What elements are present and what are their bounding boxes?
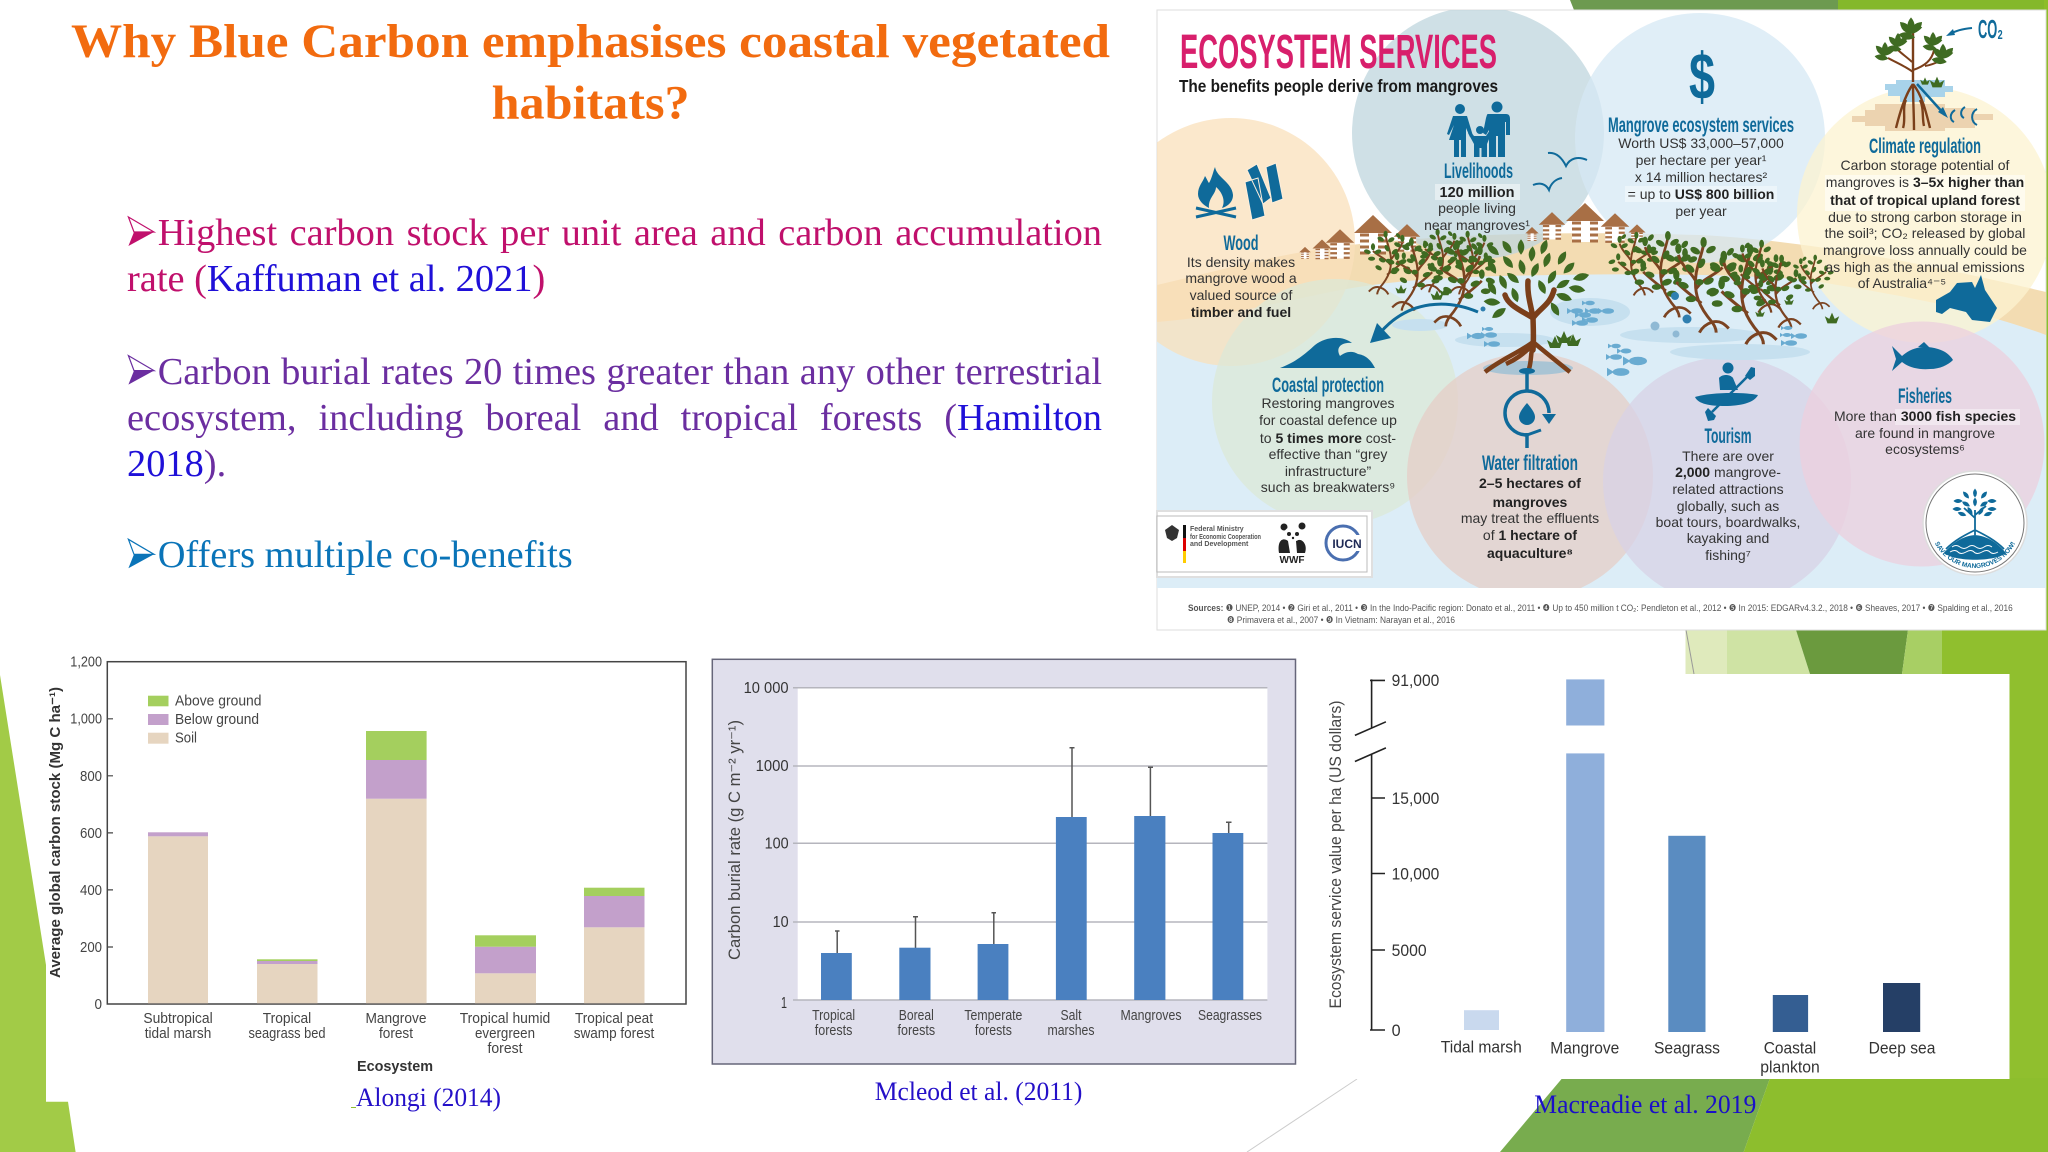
x labels: Seagrasses <box>1198 1007 1262 1024</box>
x labels: forests <box>898 1022 935 1039</box>
y ticks: 0 <box>1392 1022 1401 1040</box>
heading: ecosystem services: ECOSYSTEM SERVICES <box>1180 26 1497 79</box>
block: water filtration: may treat the effluents <box>1461 510 1599 526</box>
block: tourism: There are over <box>1682 448 1774 464</box>
bar: mangrove forest <box>366 731 427 1003</box>
chart 3 white backing <box>1300 674 2010 1079</box>
block: livelihoods: 120 million <box>1440 185 1514 201</box>
y ticks: 400 <box>80 883 102 899</box>
background: lower right green facets <box>1247 630 2048 1152</box>
heading: water filtration: Water filtration <box>1482 452 1578 475</box>
x labels: Mangrove <box>1550 1040 1619 1058</box>
block: livelihoods <box>1424 102 1530 233</box>
y ticks: 91,000 <box>1392 672 1439 690</box>
logos box <box>1157 511 1372 577</box>
x labels: forests <box>975 1022 1012 1039</box>
block: climate regulation: as high as the annual emissions <box>1825 259 2025 275</box>
icon: German eagle <box>1165 525 1179 541</box>
legend: Above ground <box>175 694 262 710</box>
mangrove trees right group <box>1608 231 1834 344</box>
bars <box>821 816 1243 1000</box>
block: coastal protection <box>1259 304 1478 495</box>
x labels: Tropical humid <box>460 1011 550 1027</box>
legend: Soil <box>175 730 197 746</box>
bullet 2 text: 2018). <box>127 442 226 484</box>
bullet 1 text: rate (Kaffuman et al. 2021) <box>127 258 545 300</box>
y ticks: 15,000 <box>1392 790 1439 808</box>
block: fisheries <box>1834 342 2020 457</box>
chart: average global carbon stock <box>47 655 686 1075</box>
x labels: Mangroves <box>1120 1007 1182 1024</box>
heading: tourism: Tourism <box>1704 425 1752 448</box>
icon: family <box>1447 102 1510 157</box>
block: wood: timber and fuel <box>1191 304 1291 320</box>
y ticks: 5000 <box>1392 942 1427 960</box>
icon: Australia <box>1936 275 1997 322</box>
icon: dollar: $ <box>1689 39 1715 113</box>
bullet 2 text: ecosystem, including boreal and tropical forests (Hamilton <box>127 396 1102 438</box>
heading: livelihoods: Livelihoods <box>1444 160 1513 183</box>
block: tourism: boat tours, boardwalks, <box>1656 514 1800 530</box>
panel background <box>712 659 1296 1064</box>
block: climate regulation: mangrove loss annually could be <box>1823 242 2027 258</box>
block: coastal protection: infrastructure” <box>1285 463 1372 479</box>
x labels: Tidal marsh <box>1441 1039 1522 1057</box>
block: water filtration: of 1 hectare of <box>1483 527 1577 543</box>
x labels: Tropical peat <box>575 1011 653 1027</box>
block: mangrove ecosystem services: Worth US$ 33,000–57,000 <box>1618 135 1784 151</box>
bar: subtropical tidal marsh <box>148 832 208 1003</box>
block: tourism: kayaking and <box>1687 530 1769 546</box>
y ticks: 100 <box>765 836 789 852</box>
x labels: forest <box>379 1026 413 1042</box>
x labels: tidal marsh <box>145 1026 211 1042</box>
block: fisheries: ecosystems⁶ <box>1885 441 1965 457</box>
x labels: Deep sea <box>1869 1040 1936 1058</box>
y ticks: 200 <box>80 940 102 956</box>
block: climate regulation: due to strong carbon storage in <box>1828 209 2022 225</box>
y ticks: 1,000 <box>70 712 102 728</box>
icon: bullet arrow 1 <box>128 217 154 246</box>
x labels <box>812 1007 1262 1039</box>
icon: WWF panda: WWF <box>1280 555 1304 566</box>
x labels <box>1441 1039 1936 1076</box>
heading: wood: Wood <box>1224 232 1258 255</box>
y ticks: 600 <box>80 826 102 842</box>
block: fisheries: More than 3000 fish species <box>1834 408 2016 424</box>
title <box>71 15 1110 130</box>
block: mangrove ecosystem services: x 14 million hectares² <box>1635 169 1767 185</box>
y ticks: 10,000 <box>1392 866 1439 884</box>
block: tourism <box>1656 362 1800 563</box>
chart: ecosystem service value <box>1327 672 1936 1076</box>
block: mangrove ecosystem services: per year <box>1675 203 1727 219</box>
ministry text: Federal Ministry <box>1190 526 1244 533</box>
x labels <box>143 1011 654 1057</box>
badge: save our mangroves now: SAVE OUR MANGROVES NOW! <box>1935 542 2015 568</box>
x labels: marshes <box>1048 1022 1094 1039</box>
heading: coastal protection: Coastal protection <box>1272 374 1384 397</box>
block: climate regulation: of Australia⁴⁻⁵ <box>1858 275 1946 291</box>
x labels: Tropical <box>812 1007 855 1024</box>
icon: IUCN <box>1326 526 1363 560</box>
bar: seagrass <box>1668 836 1706 1032</box>
block: wood: valued source of <box>1190 287 1292 303</box>
heading: climate regulation: Climate regulation <box>1869 135 1981 158</box>
y axis title: Carbon burial rate (g C m⁻² yr⁻¹) <box>726 720 744 960</box>
block: tourism: related attractions <box>1672 481 1784 497</box>
bar: tropical seagrass bed <box>257 959 318 1003</box>
mangrove trees left group <box>1363 229 1496 326</box>
block: tourism: 2,000 mangrove- <box>1675 464 1781 480</box>
icon: IUCN: IUCN <box>1332 537 1362 551</box>
title: habitats? <box>492 76 690 130</box>
block: climate regulation <box>1823 14 2027 322</box>
x labels: Boreal <box>899 1007 934 1024</box>
y axis title: Ecosystem service value per ha (US dollars) <box>1327 700 1345 1008</box>
block: climate regulation: mangroves is 3–5x higher than <box>1826 174 2024 190</box>
x labels: Mangrove <box>366 1011 426 1027</box>
legend <box>148 694 262 746</box>
bullet 2 text: Carbon burial rates 20 times greater than any other terrestrial <box>158 350 1102 392</box>
block: climate regulation: the soil³; CO₂ released by global <box>1825 225 2025 241</box>
block: water filtration: 2–5 hectares of <box>1479 475 1581 491</box>
panel: ecosystem services infographic <box>1156 10 2046 630</box>
y axis title: Average global carbon stock (Mg C ha⁻¹) <box>47 687 64 978</box>
icon: water cycle <box>1505 368 1556 448</box>
citation: Mcleod: Mcleod et al. (2011) <box>875 1077 1082 1106</box>
y ticks: 1,200 <box>70 655 102 671</box>
plot area <box>798 688 1267 1000</box>
bar: coastal plankton <box>1773 995 1808 1032</box>
badge: save our mangroves now <box>1922 470 2028 576</box>
x labels: Temperate <box>964 1007 1022 1024</box>
ministry text <box>1190 526 1261 548</box>
y ticks <box>744 680 789 1012</box>
block: coastal protection: Restoring mangroves <box>1261 395 1395 411</box>
chart: carbon burial rate <box>712 659 1296 1064</box>
x labels: Salt <box>1060 1007 1082 1024</box>
block: mangrove ecosystem services: per hectare per year¹ <box>1636 152 1767 168</box>
icon: kayak <box>1695 362 1758 421</box>
icon: flame and logs <box>1196 163 1283 220</box>
icon: tree with CO2 <box>1852 14 2003 131</box>
icon: wave <box>1280 338 1375 368</box>
background: top right green strip <box>1570 0 2048 640</box>
sources: ❽ Primavera et al., 2007 • ❾ In Vietnam: Narayan et al., 2016 <box>1227 615 1455 626</box>
icon: bullet arrow 3 <box>128 539 154 568</box>
icon: fish <box>1892 342 1953 371</box>
crabs <box>1480 292 1692 338</box>
x labels: plankton <box>1760 1058 1820 1076</box>
block: coastal protection: effective than “grey <box>1269 446 1387 462</box>
block: water filtration: aquaculture⁸ <box>1487 545 1573 561</box>
block: wood <box>1185 163 1297 320</box>
x labels: forests <box>815 1022 852 1039</box>
bullet 2 text <box>127 350 1102 484</box>
block: climate regulation: that of tropical upland forest <box>1830 192 2020 208</box>
block: coastal protection: to 5 times more cost- <box>1260 430 1396 446</box>
block: tourism: fishing⁷ <box>1705 547 1751 563</box>
water patches <box>1392 298 1810 360</box>
error bars <box>835 748 1232 953</box>
huts <box>1299 203 1646 259</box>
y ticks: 10 000 <box>744 680 789 697</box>
big central mangrove tree <box>1483 239 1590 372</box>
icon: flag bar <box>1183 525 1186 563</box>
plot frame <box>107 662 686 1004</box>
icon: WWF panda <box>1279 522 1306 566</box>
block: climate regulation: Carbon storage potential of <box>1841 157 2010 173</box>
bar: tropical peat swamp forest <box>584 888 644 1003</box>
block: water filtration: mangroves <box>1493 494 1568 510</box>
y ticks: 1000 <box>756 758 789 775</box>
heading: fisheries: Fisheries <box>1898 385 1952 408</box>
sources <box>1188 603 2013 626</box>
x labels: forest <box>488 1041 522 1057</box>
block: wood: mangrove wood a <box>1185 270 1297 286</box>
ministry text: for Economic Cooperation <box>1190 534 1261 541</box>
block: mangrove ecosystem services: = up to US$ 800 billion <box>1628 186 1774 202</box>
block: coastal protection: for coastal defence up <box>1259 412 1397 428</box>
heading: mangrove ecosystem services: Mangrove ecosystem services <box>1608 114 1794 137</box>
block: mangrove ecosystem services <box>1608 39 1794 219</box>
y ticks <box>1392 672 1439 1040</box>
y ticks: 10 <box>773 914 789 931</box>
block: wood: Its density makes <box>1187 254 1295 270</box>
bullet 1 text <box>127 212 1102 300</box>
bullet 3 text: Offers multiple co-benefits <box>158 534 573 576</box>
citation: Alongi: Alongi (2014) <box>356 1083 501 1112</box>
block: climate regulation: CO₂ <box>1978 14 2003 44</box>
icon: bullet arrow 2 <box>128 356 154 385</box>
bullet arrows <box>128 217 154 568</box>
bullet 1 text: Highest carbon stock per unit area and carbon accumulation <box>158 212 1102 254</box>
block: livelihoods: near mangroves¹ <box>1424 217 1530 233</box>
y ticks: 1 <box>781 995 787 1012</box>
x labels: Coastal <box>1764 1040 1816 1058</box>
y ticks <box>70 655 102 1013</box>
bar: tropical humid evergreen forest <box>475 935 536 1003</box>
legend: Below ground <box>175 712 259 728</box>
block: water filtration <box>1461 368 1599 561</box>
ministry text: and Development <box>1190 541 1249 548</box>
block: livelihoods: people living <box>1438 200 1516 216</box>
x labels: evergreen <box>475 1026 535 1042</box>
axis <box>1355 679 1386 1030</box>
bar: tidal marsh <box>1464 1010 1499 1030</box>
x labels: Seagrass <box>1654 1040 1720 1058</box>
block: tourism: globally, such as <box>1677 498 1779 514</box>
bar: deep sea <box>1883 983 1920 1032</box>
y ticks: 0 <box>94 997 102 1013</box>
subheading: The benefits people derive from mangroves <box>1179 76 1498 96</box>
icon: blue curved arrow <box>1370 304 1478 343</box>
x labels: seagrass bed <box>248 1026 326 1042</box>
fish schools and plants <box>1395 285 1839 376</box>
y ticks: 800 <box>80 769 102 785</box>
block: fisheries: are found in mangrove <box>1855 425 1995 441</box>
icon: birds <box>1533 153 1587 190</box>
bar: mangrove <box>1566 679 1604 1032</box>
citation: Macreadie: Macreadie et al. 2019 <box>1534 1090 1756 1119</box>
title: Why Blue Carbon emphasises coastal vegetated <box>71 15 1110 68</box>
x labels: Subtropical <box>143 1011 213 1027</box>
x labels: Tropical <box>263 1011 311 1027</box>
x axis title: Ecosystem <box>357 1058 433 1075</box>
block: coastal protection: such as breakwaters⁹ <box>1261 479 1395 495</box>
x labels: swamp forest <box>574 1026 654 1042</box>
background: left green wedge <box>0 675 76 1152</box>
